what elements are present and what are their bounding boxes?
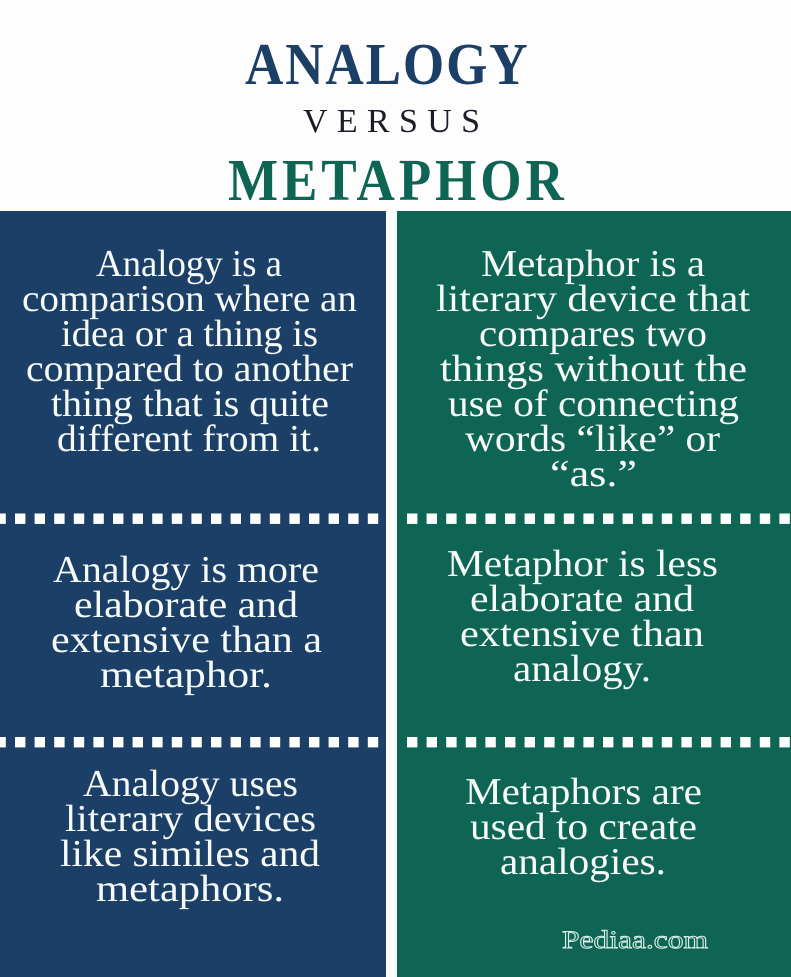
text block: metaphor usage: used to create	[470, 806, 697, 848]
text block: analogy usage: literary devices	[65, 798, 316, 840]
text block: analogy elaboration	[51, 549, 322, 696]
text block: metaphor definition: Metaphor is a	[481, 243, 705, 285]
text block: metaphor definition: use of connecting	[448, 383, 739, 425]
title: Analogy versus Metaphor	[228, 32, 565, 214]
text block: metaphor definition: compares two	[479, 313, 707, 355]
text block: analogy definition: comparison where an	[22, 278, 357, 320]
text block: analogy elaboration: elaborate and	[74, 584, 298, 626]
text block: metaphor usage	[465, 771, 702, 883]
text block: analogy usage: metaphors.	[96, 868, 284, 910]
text block: analogy definition	[22, 243, 357, 460]
text block: metaphor elaboration: extensive than	[460, 613, 704, 655]
text block: analogy definition: compared to another	[26, 348, 353, 390]
heading: versus: VERSUS	[303, 103, 480, 140]
text block: analogy usage: like similes and	[60, 833, 320, 875]
text block: metaphor elaboration: analogy.	[513, 648, 651, 690]
heading: Analogy: ANALOGY	[245, 32, 528, 98]
panel: analogy column background	[0, 211, 386, 977]
text block: metaphor definition: literary device that	[436, 278, 750, 320]
text block: analogy definition: different from it.	[57, 418, 321, 460]
panel: metaphor column background	[397, 211, 791, 977]
text block: analogy definition: idea or a thing is	[61, 313, 318, 355]
text block: analogy definition: Analogy is a	[96, 243, 282, 285]
divider: second dotted row	[0, 737, 790, 747]
text block: metaphor definition: “as.”	[550, 453, 637, 495]
text block: metaphor elaboration: Metaphor is less	[447, 543, 718, 585]
text block: analogy elaboration: extensive than a	[51, 619, 322, 661]
heading: Metaphor: METAPHOR	[228, 148, 565, 214]
text block: metaphor definition: words “like” or	[465, 418, 720, 460]
text block: analogy elaboration: Analogy is more	[53, 549, 319, 591]
text block: analogy elaboration: metaphor.	[100, 654, 272, 696]
text block: metaphor elaboration: elaborate and	[470, 578, 694, 620]
text block: metaphor definition	[436, 243, 750, 495]
text block: metaphor definition: things without the	[440, 348, 747, 390]
text block: metaphor usage: Metaphors are	[465, 771, 702, 813]
text block: analogy definition: thing that is quite	[51, 383, 329, 425]
text block: metaphor elaboration	[447, 543, 718, 690]
text block: analogy usage: Analogy uses	[83, 763, 298, 805]
text block: metaphor usage: analogies.	[500, 841, 666, 883]
divider: first dotted row	[0, 514, 790, 524]
text block: analogy usage	[60, 763, 320, 910]
logo: Pediaa.com: Pediaa.com	[562, 927, 709, 954]
